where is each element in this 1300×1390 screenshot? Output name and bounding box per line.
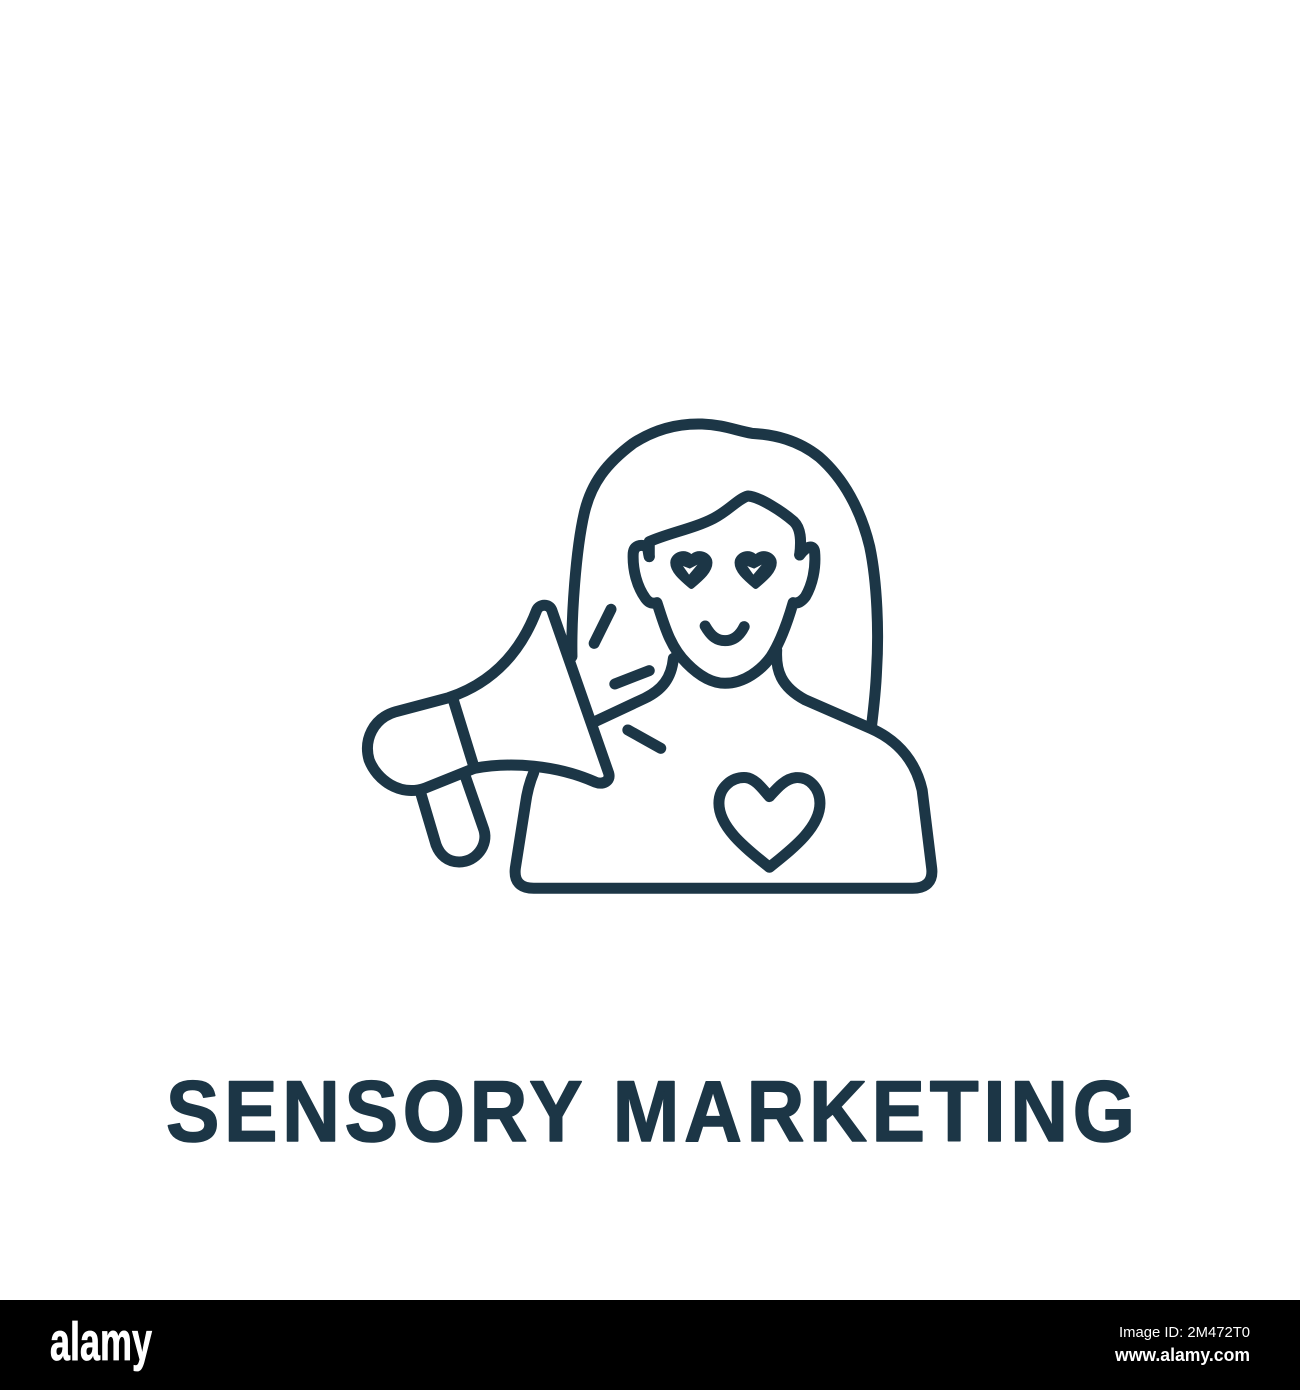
icon: face outline <box>633 496 815 683</box>
title: Sensory Marketing: SENSORY MARKETING <box>166 1063 1135 1160</box>
footer text: website: www.alamy.com <box>1114 1345 1250 1365</box>
icon: smile <box>705 626 744 641</box>
icon: woman with megaphone <box>368 424 932 888</box>
footer logo: alamy: alamy <box>50 1312 152 1372</box>
icon: hair outline <box>572 424 878 728</box>
footer bar <box>0 1300 1300 1390</box>
icon: body and shoulders <box>515 650 932 888</box>
icon: sound lines <box>594 609 661 748</box>
footer text: image id: Image ID: 2M472T0 <box>1119 1324 1250 1341</box>
icon: heart eyes <box>674 555 773 585</box>
icon: chest heart <box>719 778 820 867</box>
icon: megaphone <box>368 605 673 862</box>
